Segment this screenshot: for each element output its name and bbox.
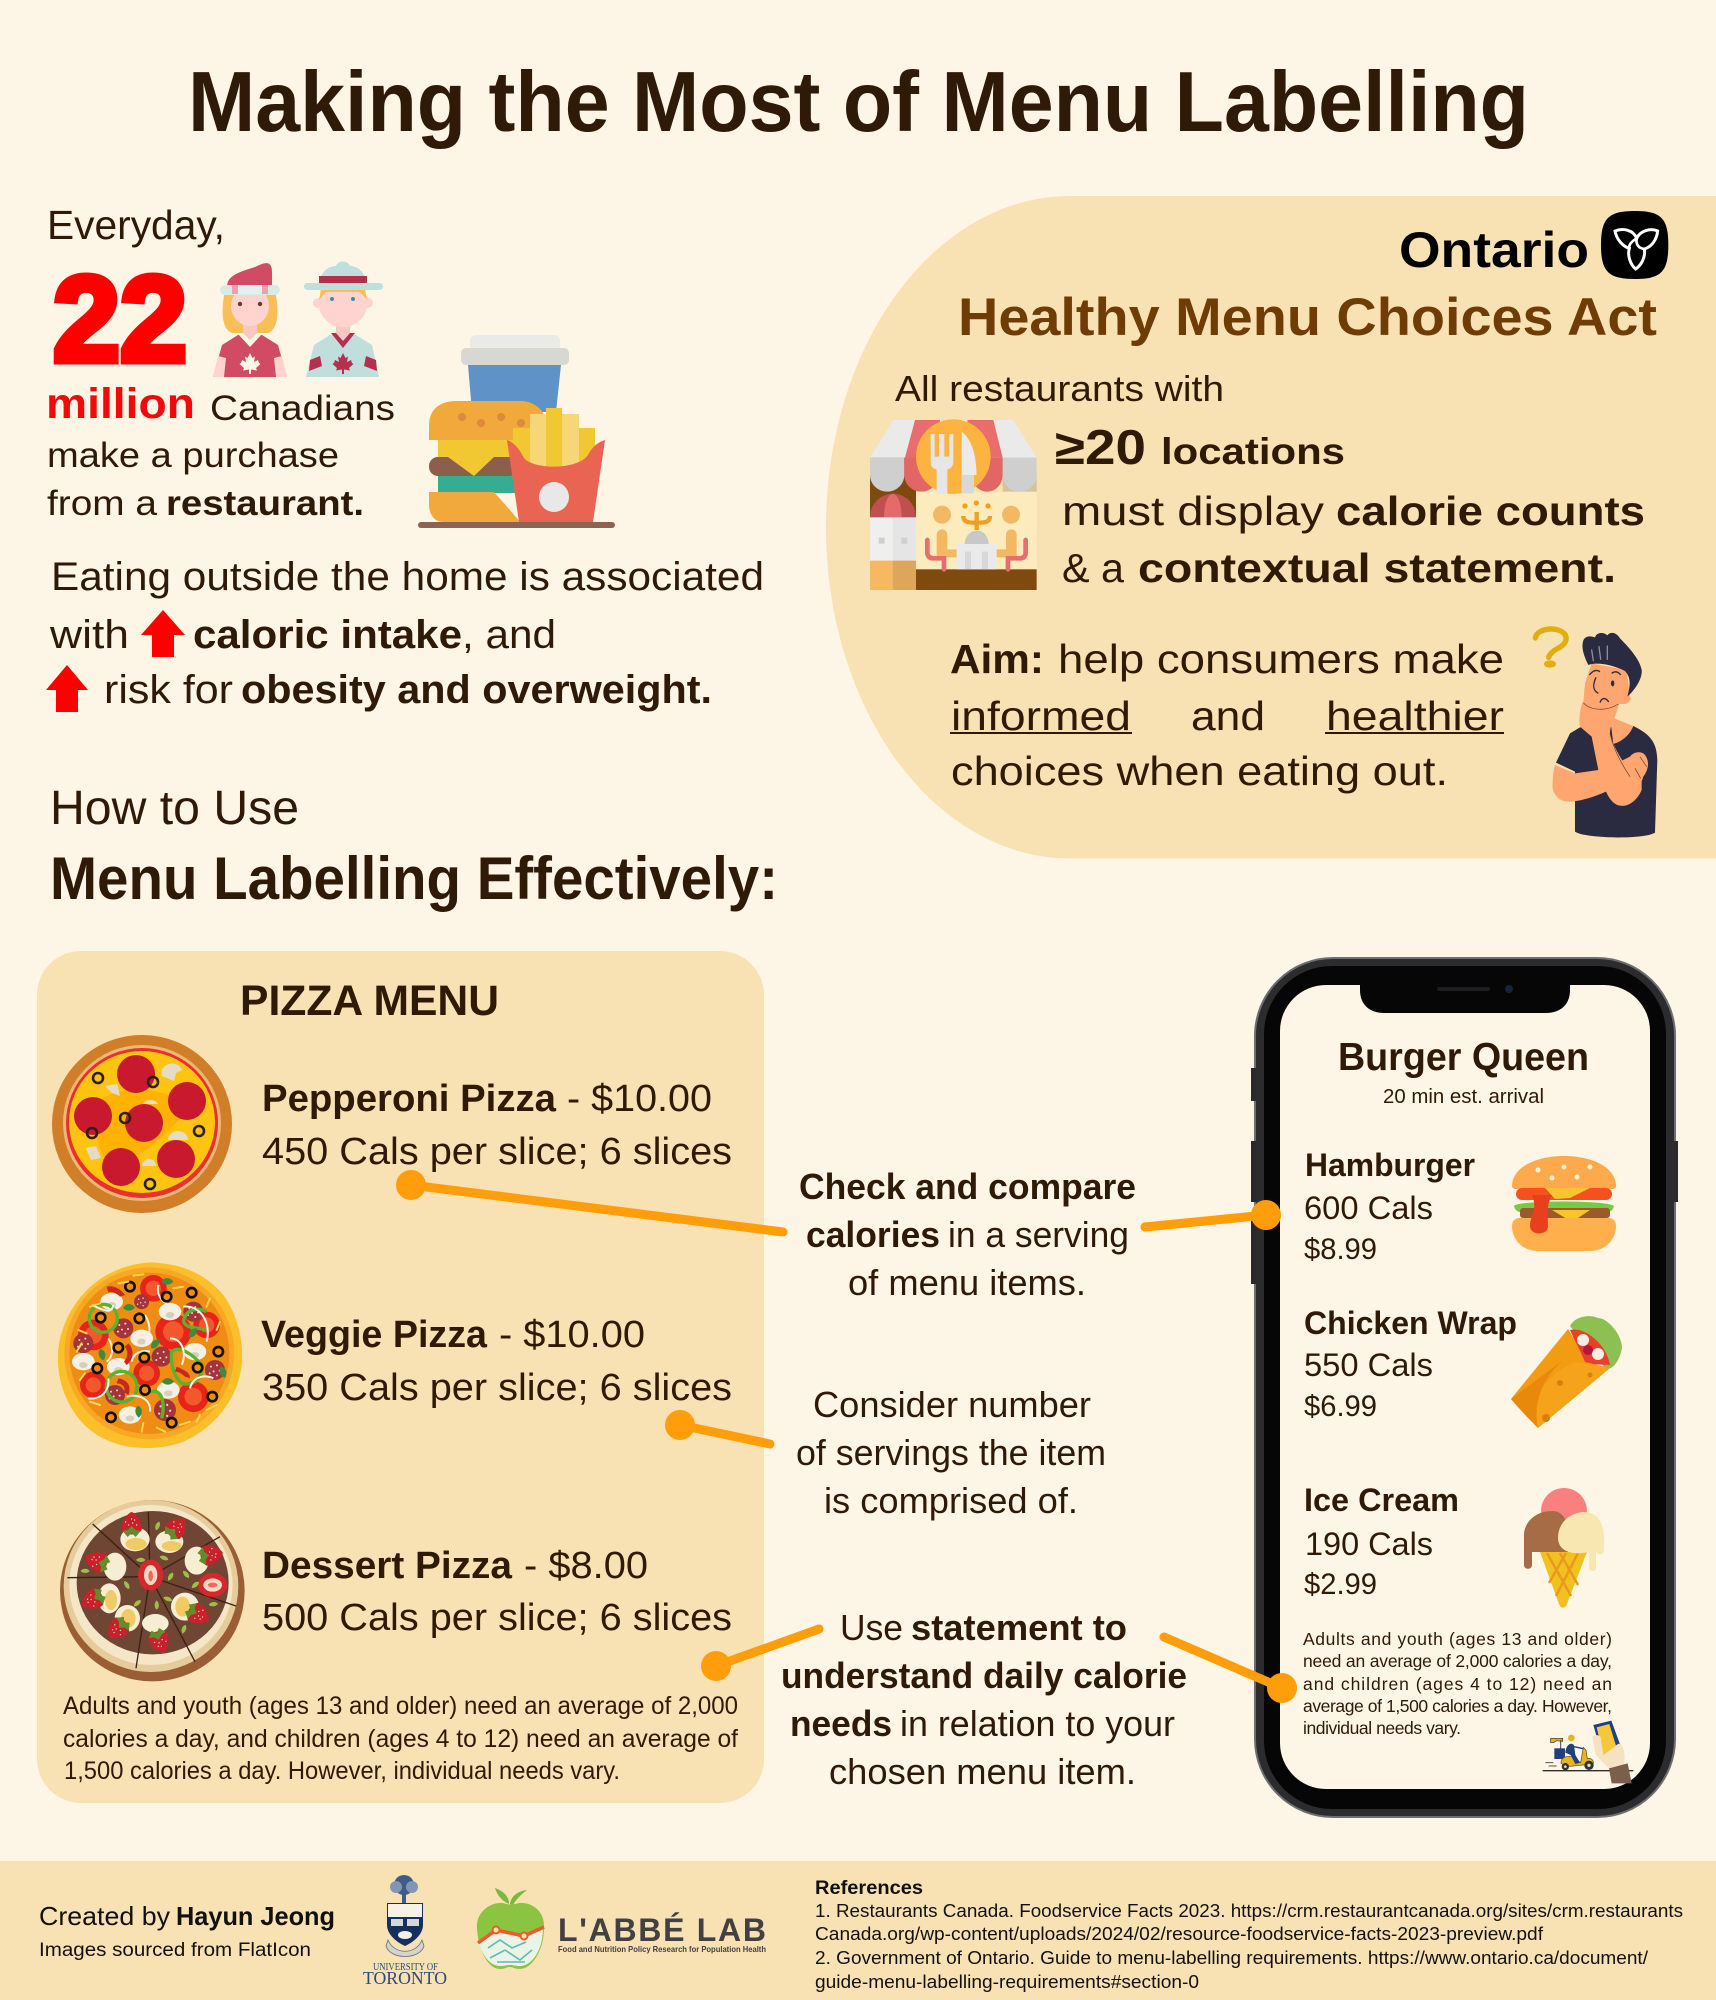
- callout: use statement: chosen menu item.: [829, 1751, 1136, 1792]
- intro text: million Canadians make a purchase: make a purchase: [47, 436, 339, 475]
- Ontario wordmark: Ontario: [1399, 222, 1589, 278]
- text: must display calorie counts: contextual statement.: [1138, 545, 1616, 591]
- text: chicken wrap: [1304, 1305, 1517, 1423]
- text: dessert pizza: [262, 1545, 732, 1639]
- text: must display calorie counts: calorie counts: [1336, 488, 1645, 534]
- text block: health risks: obesity and overweight.: [241, 668, 712, 712]
- text: phone contextual statement: Adults and youth (ages 13 and older): [1303, 1629, 1612, 1649]
- text: aim statement: Aim:: [950, 636, 1044, 682]
- callout: check and compare calories: in a serving: [948, 1214, 1129, 1255]
- intro text: million Canadians make a purchase: million: [46, 380, 195, 428]
- text: phone contextual statement: [1303, 1629, 1612, 1738]
- references: guide-menu-labelling-requirements#section-0: [815, 1972, 1199, 1992]
- text: veggie pizza: 350 Cals per slice; 6 slices: [262, 1367, 732, 1409]
- arrow: increased risk: [46, 665, 88, 712]
- logo: L'Abbé Lab apple: [477, 1888, 544, 1969]
- references: 2. Government of Ontario. Guide to menu-labelling requirements. https://www.ontario.ca/document/: [815, 1948, 1648, 1968]
- heading: Healthy Menu Choices Act: Healthy Menu Choices Act: [958, 288, 1657, 347]
- text block: health risks: caloric intake: [193, 613, 462, 657]
- text: hamburger: $8.99: [1304, 1233, 1377, 1266]
- text: phone contextual statement: need an average of 2,000 calories a day,: [1303, 1651, 1612, 1671]
- callout: check and compare calories: calories: [806, 1214, 940, 1255]
- text: phone contextual statement: and children (ages 4 to 12) need an: [1303, 1674, 1612, 1694]
- intro text: million Canadians make a purchase: Canadians: [210, 389, 395, 428]
- heading: how to use: [50, 782, 778, 912]
- logo: University of Toronto: TORONTO: [363, 1968, 447, 1988]
- text block: health risks: risk for: [104, 668, 233, 712]
- text: aim statement: [950, 636, 1504, 794]
- callout: use statement: Use: [840, 1607, 903, 1648]
- credits: Images sourced from FlatIcon: [39, 1940, 311, 1961]
- icon: woman in Canada jersey: [213, 263, 287, 377]
- text: aim statement: choices when eating out.: [951, 748, 1448, 794]
- text: pepperoni pizza: - $10.00: [567, 1078, 712, 1120]
- text block: health risks: , and: [462, 613, 556, 657]
- text: chicken wrap: $6.99: [1304, 1390, 1377, 1423]
- text: aim statement: help consumers make: [1058, 636, 1504, 682]
- panel: Ontario Healthy Menu Choices Act: [826, 196, 1716, 858]
- text: chicken wrap: Chicken Wrap: [1304, 1305, 1517, 1341]
- text: hamburger: 600 Cals: [1304, 1190, 1433, 1226]
- credits: [39, 1901, 335, 1961]
- text: dessert pizza: - $8.00: [524, 1545, 648, 1587]
- text: contextual statement: calories a day, and children (ages 4 to 12) need an average of: [63, 1725, 738, 1753]
- icon: chicken wrap: [1511, 1316, 1622, 1428]
- logo: University of Toronto: UNIVERSITY OF: [373, 1962, 438, 1973]
- credits: Hayun Jeong: [176, 1901, 335, 1931]
- callout: check and compare calories: Check and compare: [799, 1166, 1136, 1207]
- footer band: [0, 1861, 1716, 2000]
- icon: thinking man: [1553, 633, 1657, 837]
- heading: pizza menu: PIZZA MENU: [240, 977, 499, 1025]
- text: hamburger: Hamburger: [1305, 1147, 1475, 1183]
- references: [815, 1878, 1683, 1992]
- logo: L'Abbé Lab wordmark: Food and Nutrition Policy Research for Population Health: [558, 1944, 766, 1954]
- text: aim statement: healthier: [1326, 693, 1504, 739]
- intro text: million Canadians make a purchase: from a: [47, 484, 158, 523]
- text: chicken wrap: 550 Cals: [1304, 1347, 1433, 1383]
- illustration: pepperoni pizza: [52, 1035, 232, 1213]
- heading: Burger Queen: Burger Queen: [1338, 1036, 1589, 1079]
- icon: Ontario trillium logo: [1601, 211, 1668, 279]
- references: References: [815, 1878, 923, 1899]
- text: contextual statement: Adults and youth (ages 13 and older) need an average of 2,000: [63, 1692, 738, 1720]
- connector: statement to phone: [1164, 1637, 1297, 1703]
- text: veggie pizza: - $10.00: [499, 1314, 645, 1356]
- credits: Created by: [39, 1901, 170, 1931]
- intro text: million Canadians make a purchase: [46, 380, 395, 523]
- callout: check and compare calories: [799, 1166, 1136, 1303]
- panel: pizza menu: [37, 951, 764, 1803]
- text: 20 or more locations: locations: [1161, 431, 1345, 472]
- text: aim statement: informed: [951, 693, 1131, 739]
- title: Making the Most of Menu Labelling: [188, 55, 1529, 150]
- callout: use statement: statement to: [911, 1607, 1127, 1648]
- callout: use statement: understand daily calorie: [781, 1655, 1187, 1696]
- text: contextual statement: 1,500 calories a day. However, individual needs vary.: [64, 1757, 620, 1785]
- connector: veggie to servings: [665, 1410, 770, 1444]
- text: ice cream: [1304, 1482, 1459, 1601]
- text: veggie pizza: [261, 1314, 732, 1409]
- connector: dessert to statement: [701, 1629, 819, 1681]
- intro text: everyday: Everyday,: [47, 202, 225, 248]
- callout: use statement: needs: [790, 1703, 892, 1744]
- icon: question mark: [1535, 629, 1566, 668]
- text: aim statement: and: [1191, 693, 1265, 739]
- text block: health risks: with: [49, 613, 129, 657]
- text: phone contextual statement: average of 1,500 calories a day. However,: [1303, 1696, 1612, 1716]
- icon: delivery scooter and phone: [1543, 1721, 1633, 1783]
- text block: health risks: Eating outside the home is associated: [51, 555, 764, 599]
- text: contextual statement: [63, 1692, 738, 1785]
- text block: health risks: [49, 555, 764, 712]
- text: pepperoni pizza: 450 Cals per slice; 6 slices: [262, 1131, 732, 1173]
- text: veggie pizza: Veggie Pizza: [261, 1314, 488, 1356]
- heading: Burger Queen: [1338, 1036, 1589, 1108]
- heading: how to use: How to Use: [50, 782, 299, 835]
- icon: hamburger: [1512, 1156, 1616, 1251]
- callout: number of servings: Consider number: [813, 1384, 1091, 1425]
- arrow: increased caloric intake: [141, 610, 185, 657]
- intro text: million Canadians make a purchase: restaurant.: [166, 484, 364, 523]
- statistic: 22: 22: [53, 251, 187, 387]
- text: pepperoni pizza: Pepperoni Pizza: [262, 1078, 557, 1120]
- text: 20 or more locations: [1055, 421, 1345, 475]
- logo: University of Toronto: [363, 1875, 447, 1988]
- icon: burger, fries and drink: [418, 335, 615, 528]
- connector: check and compare to hamburger: [1145, 1200, 1281, 1230]
- callout: use statement: [781, 1607, 1187, 1792]
- illustration: veggie pizza: [58, 1262, 242, 1448]
- text: ice cream: Ice Cream: [1304, 1482, 1459, 1518]
- text: dessert pizza: Dessert Pizza: [262, 1545, 513, 1587]
- icon: man in Mountie hat: [304, 262, 383, 377]
- text: must display calorie counts: [1062, 488, 1645, 591]
- text: ice cream: $2.99: [1304, 1568, 1377, 1601]
- callout: use statement: in relation to your: [900, 1703, 1175, 1744]
- references: Canada.org/wp-content/uploads/2024/02/resource-foodservice-facts-2023-preview.pdf: [815, 1924, 1544, 1944]
- text: 20 or more locations: ≥20: [1055, 421, 1146, 475]
- references: 1. Restaurants Canada. Foodservice Facts 2023. https://crm.restaurantcanada.org/sites/crm.restaurants: [815, 1901, 1683, 1921]
- text: phone contextual statement: individual needs vary.: [1303, 1718, 1461, 1738]
- callout: number of servings: is comprised of.: [824, 1480, 1078, 1521]
- heading: how to use: Menu Labelling Effectively:: [50, 845, 778, 912]
- text: ice cream: 190 Cals: [1305, 1526, 1433, 1562]
- heading: Burger Queen: 20 min est. arrival: [1383, 1086, 1544, 1108]
- text: hamburger: [1304, 1147, 1475, 1266]
- callout: check and compare calories: of menu items.: [848, 1262, 1086, 1303]
- text: all restaurants: All restaurants with: [895, 368, 1224, 409]
- phone mockup: [1251, 958, 1678, 1817]
- callout: number of servings: of servings the item: [796, 1432, 1106, 1473]
- logo: L'Abbé Lab wordmark: L'ABBÉ LAB: [558, 1912, 766, 1948]
- text: dessert pizza: 500 Cals per slice; 6 slices: [262, 1597, 732, 1639]
- text: must display calorie counts: & a: [1062, 545, 1124, 591]
- icon: ice cream cone: [1524, 1488, 1604, 1608]
- callout: number of servings: [796, 1384, 1106, 1521]
- text: must display calorie counts: must display: [1062, 488, 1325, 534]
- icon: restaurant storefront: [870, 419, 1037, 590]
- illustration: dessert pizza: [60, 1500, 245, 1681]
- text: pepperoni pizza: [262, 1078, 732, 1173]
- connector: pepperoni to check and compare: [396, 1170, 783, 1232]
